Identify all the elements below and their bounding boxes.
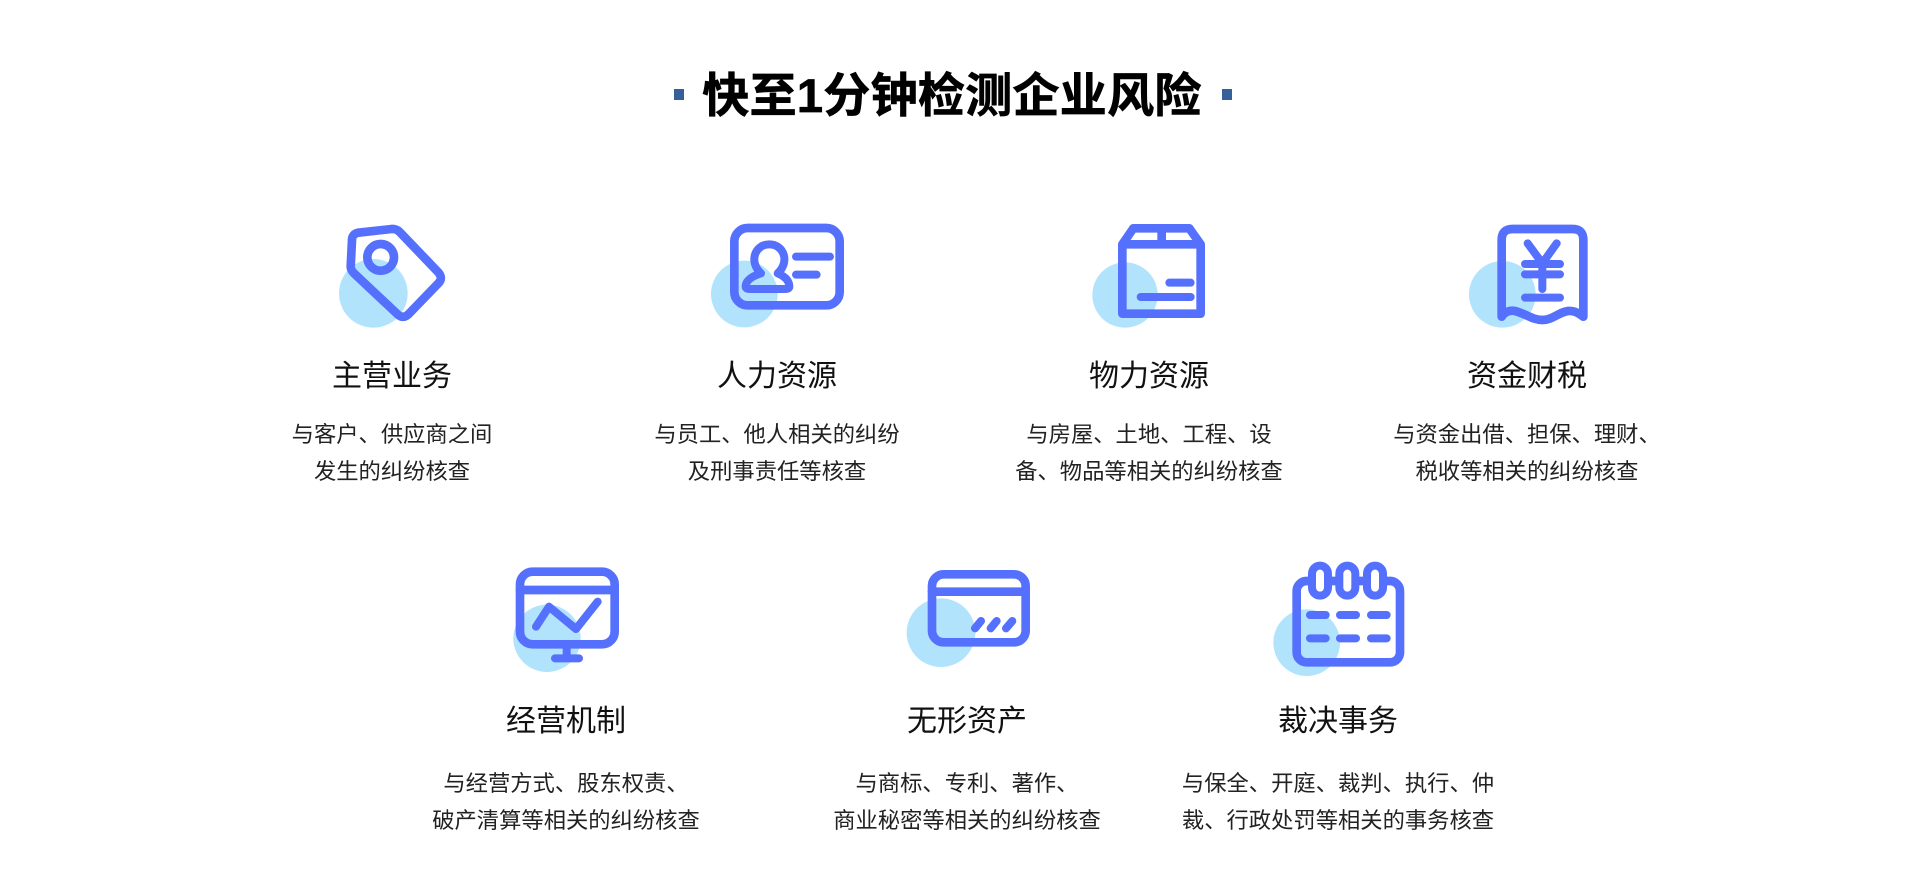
panel: 人力资源: [654, 224, 900, 484]
description: [1015, 422, 1283, 484]
description: 与资金出借、担保、理财、: [1393, 422, 1661, 447]
description: 发生的纠纷核查: [314, 459, 470, 484]
icon: calendar: [1273, 562, 1404, 676]
description: [654, 422, 900, 484]
description: 裁、行政处罚等相关的事务核查: [1182, 808, 1494, 833]
description: [1182, 771, 1494, 833]
description: 备、物品等相关的纠纷核查: [1015, 459, 1283, 484]
description: 破产清算等相关的纠纷核查: [432, 808, 700, 833]
panel: 资金财税: [1393, 224, 1661, 484]
heading: 无形资产: [907, 704, 1027, 738]
panel: 物力资源: [1015, 224, 1283, 484]
heading: 物力资源: [1089, 360, 1209, 392]
description: 税收等相关的纠纷核查: [1416, 459, 1638, 484]
description: 与房屋、土地、工程、设: [1026, 422, 1272, 447]
heading: 资金财税: [1467, 360, 1587, 392]
heading: 裁决事务: [1278, 704, 1398, 738]
description: [292, 422, 492, 484]
heading: 经营机制: [506, 704, 626, 738]
heading: 主营业务: [332, 360, 452, 392]
description: [833, 771, 1101, 833]
title text: 快至1分钟检测企业风险: [702, 69, 1202, 122]
icon: bank card: [906, 570, 1030, 667]
icon: receipt with yen: [1469, 224, 1588, 328]
description: 与商标、专利、著作、: [856, 771, 1078, 796]
icon: box: [1092, 224, 1205, 328]
panel: 无形资产: [833, 570, 1101, 833]
description: 与经营方式、股东权责、: [443, 771, 689, 796]
description: 与员工、他人相关的纠纷: [654, 422, 900, 447]
panel: 经营机制: [432, 567, 700, 833]
right title square: [1222, 89, 1232, 100]
panel: 裁决事务: [1182, 562, 1494, 833]
description: 商业秘密等相关的纠纷核查: [833, 808, 1101, 833]
heading: 人力资源: [717, 360, 837, 392]
description: [1393, 422, 1661, 484]
icon: price tag: [339, 224, 446, 328]
icon: monitor chart: [513, 567, 619, 672]
left title square: [674, 89, 684, 100]
description: [432, 771, 700, 833]
icon: id card: [711, 224, 844, 328]
description: 及刑事责任等核查: [688, 459, 866, 484]
description: 与客户、供应商之间: [292, 422, 492, 447]
description: 与保全、开庭、裁判、执行、仲: [1182, 771, 1494, 796]
panel: 主营业务: [292, 224, 492, 484]
